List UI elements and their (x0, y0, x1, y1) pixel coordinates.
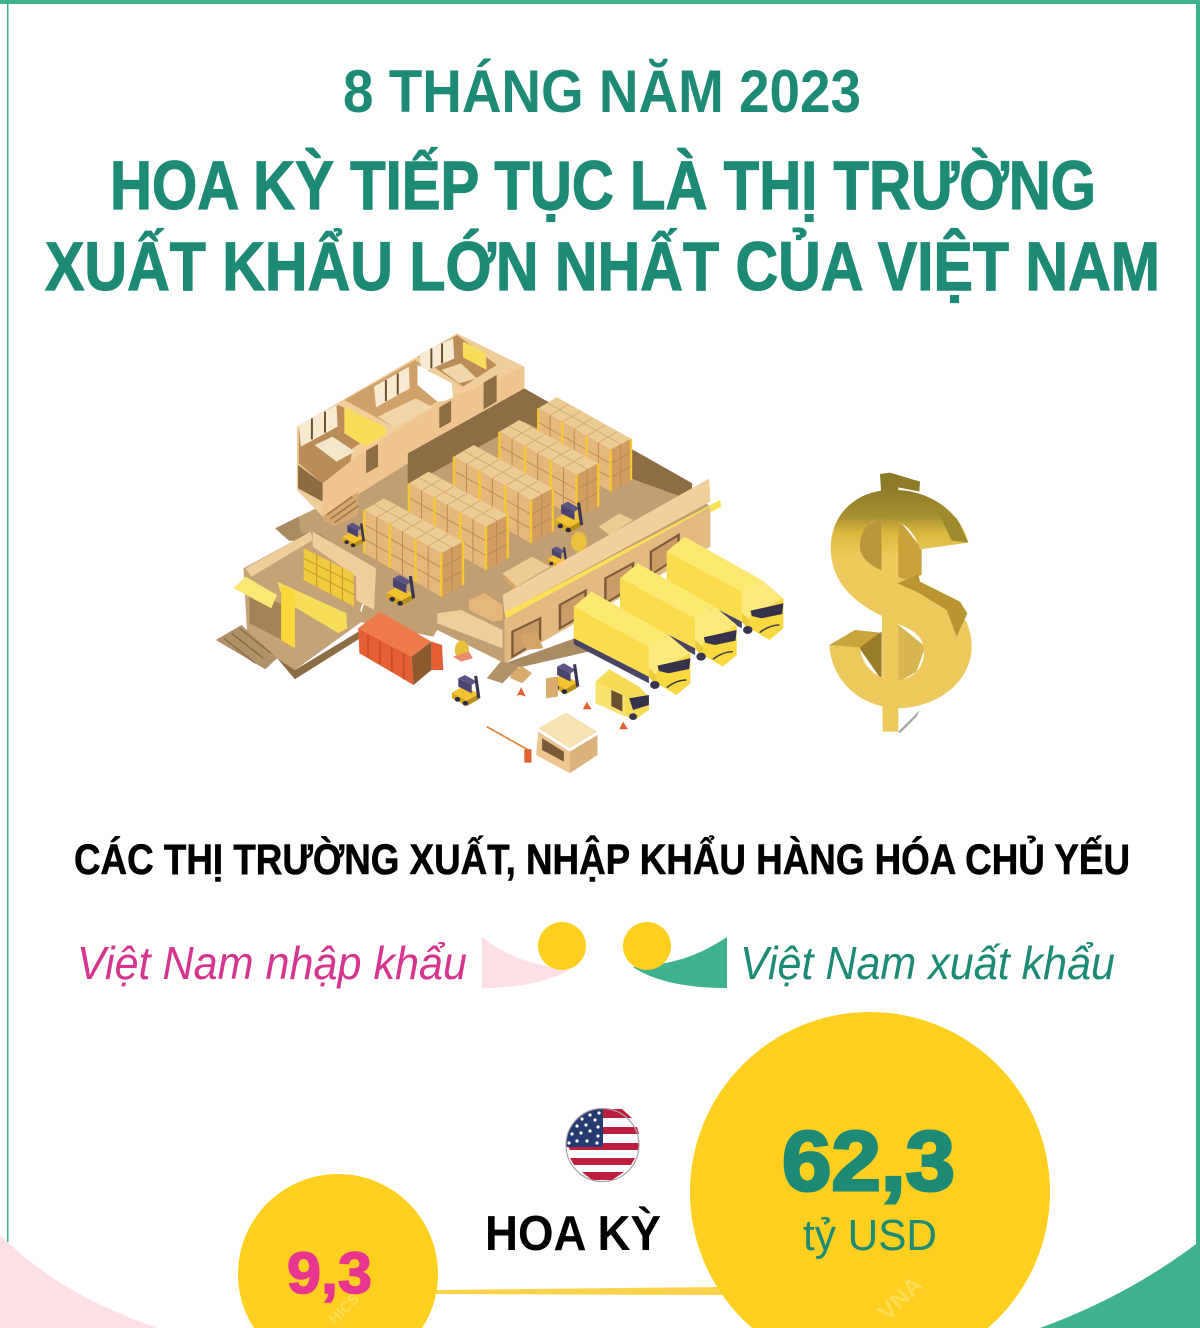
upper office block (297, 333, 524, 517)
warehouse floor (275, 388, 710, 663)
cones and crates (453, 652, 628, 729)
drums (455, 532, 587, 659)
legend: Vietnam imports: Việt Nam nhập khẩu (77, 937, 467, 989)
bubble: exports to USA: 62,3 (782, 1114, 955, 1208)
trucks (574, 537, 783, 695)
bubble: imports from USA: HICS (326, 1290, 363, 1328)
floor pallets (469, 513, 633, 622)
bubble: imports from USA (238, 1174, 438, 1328)
legend: Vietnam exports: Việt Nam xuất khẩu (740, 937, 1115, 989)
icon: US flag (566, 1108, 640, 1182)
connector line (436, 1287, 722, 1295)
title: main heading (45, 147, 1160, 305)
staircase (323, 492, 358, 527)
background corner: green (1040, 1241, 1200, 1328)
van (596, 669, 649, 720)
background corner: pink (0, 1235, 158, 1328)
storage shelves (364, 397, 631, 597)
bubble: exports to USA: tỷ USD (803, 1211, 937, 1260)
illustration: gold dollar sign (829, 473, 972, 733)
legend: Vietnam imports (77, 922, 586, 989)
legend: Vietnam exports (623, 922, 1115, 989)
country label: HOA KỲ (485, 1207, 661, 1261)
guard booth and barrier (487, 713, 597, 773)
bubble: exports to USA: VNA (873, 1271, 928, 1326)
front store (216, 532, 376, 679)
forklifts (342, 502, 582, 706)
title: period: 8 THÁNG NĂM 2023 (343, 58, 861, 125)
bubble: exports to USA (690, 1012, 1050, 1328)
illustration: isometric warehouse (216, 333, 783, 773)
shipping container (358, 612, 443, 685)
bubble: imports from USA: 9,3 (287, 1241, 372, 1306)
loading dock wall (503, 478, 721, 667)
